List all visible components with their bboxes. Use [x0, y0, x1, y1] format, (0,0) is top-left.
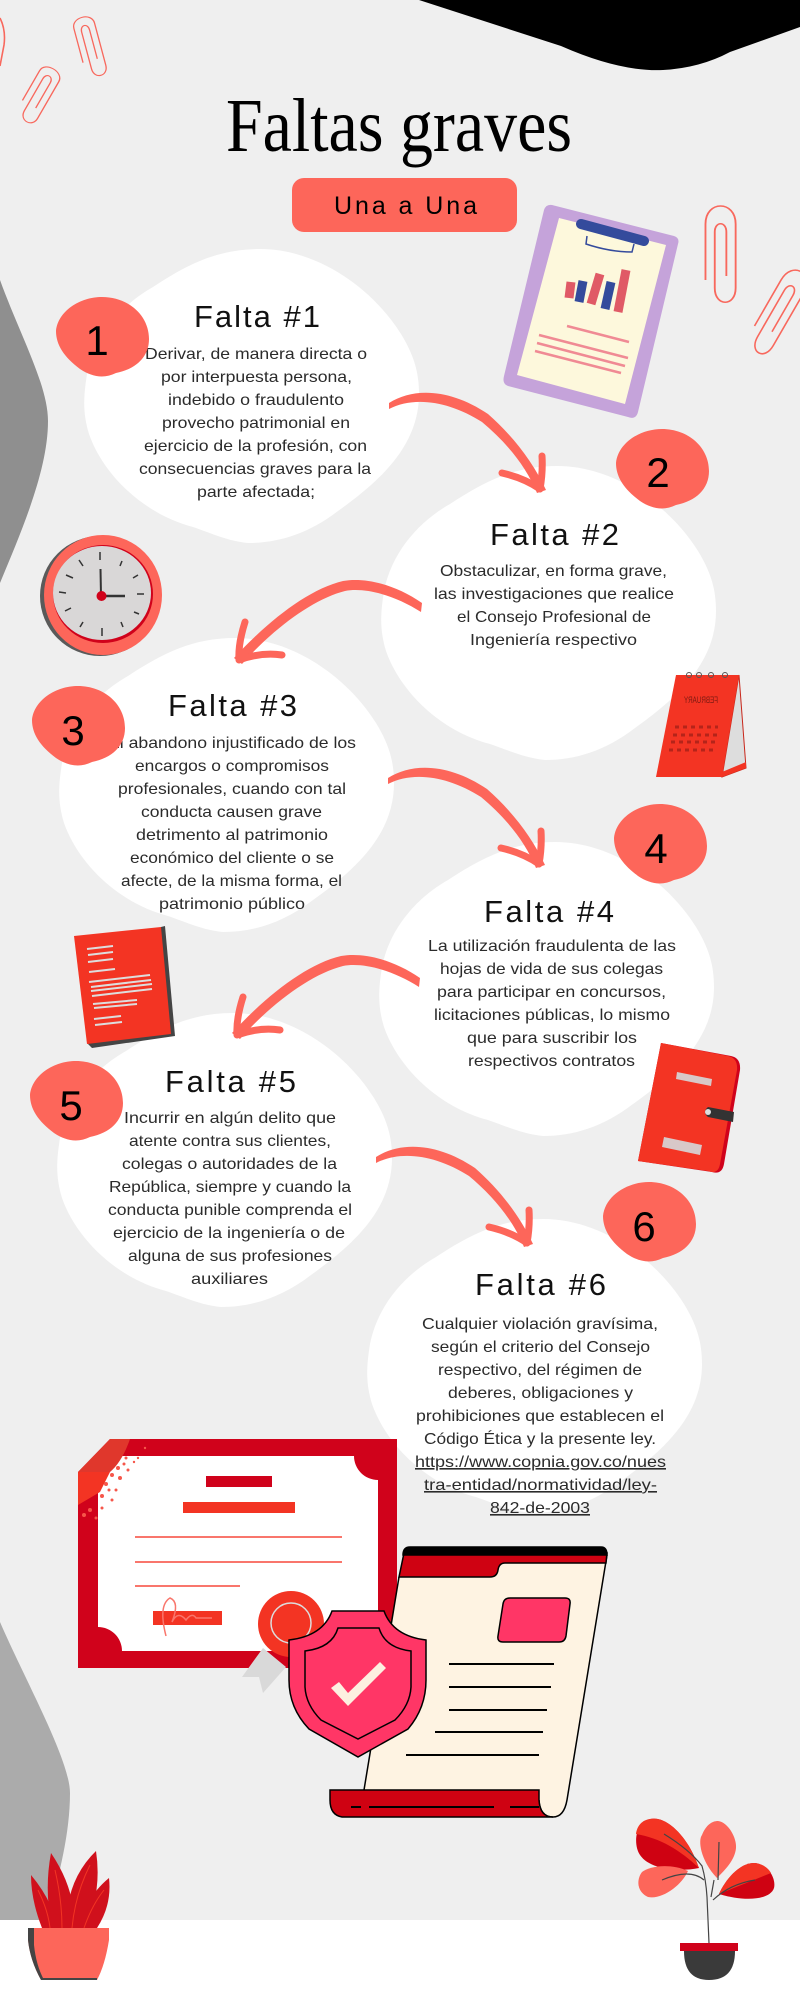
number badge 5: 5: [59, 1082, 83, 1129]
title: Faltas graves: [226, 84, 572, 168]
panel: falta 5: auxiliares: [191, 1271, 268, 1288]
gray shape left lower: [0, 1622, 70, 1920]
icon: potted plant left: [28, 1851, 110, 1980]
panel: falta 2: Obstaculizar, en forma grave,: [440, 563, 667, 580]
panel: falta 5: [57, 1013, 392, 1307]
gray shape left upper: [0, 280, 48, 583]
panel: falta 4: Falta #4: [484, 894, 614, 929]
panel: falta 6: [367, 1219, 702, 1517]
icon: red notebook: [638, 1043, 740, 1173]
number badge 4: 4: [644, 825, 668, 872]
panel: falta 6: prohibiciones que establecen el: [416, 1408, 664, 1425]
panel: falta 5: Falta #5: [165, 1064, 296, 1099]
panel: falta 1: por interpuesta persona,: [161, 369, 352, 386]
number badge 3: [32, 686, 125, 765]
panel: falta 1: parte afectada;: [197, 484, 315, 501]
number badge 6: [603, 1182, 696, 1261]
panel: falta 3: [59, 638, 394, 932]
number badge 5: [30, 1061, 123, 1140]
panel: falta 4: hojas de vida de sus colegas: [440, 961, 663, 978]
number badge 3: 3: [61, 707, 85, 754]
icon: shield with check: [289, 1611, 426, 1757]
panel: falta 5: Incurrir en algún delito que: [124, 1110, 336, 1127]
number badge 1: [56, 297, 149, 376]
panel: falta 3: El abandono injustificado de los: [108, 735, 356, 752]
number badge 1: 1: [85, 317, 109, 364]
arrow: falta 1 to 2: [389, 393, 546, 493]
panel: falta 4: para participar en concursos,: [437, 984, 666, 1001]
panel: falta 4: que para suscribir los: [467, 1030, 637, 1047]
panel: falta 4: respectivos contratos: [468, 1053, 635, 1070]
arrow: falta 2 to 3: [234, 580, 422, 664]
number badge 4: [614, 804, 707, 883]
panel: falta 1: Falta #1: [194, 299, 320, 334]
icon: clipboard: [504, 205, 678, 418]
panel: falta 2: el Consejo Profesional de: [457, 609, 651, 626]
icon: desk calendar: FEBRUARY: [684, 695, 718, 705]
panel: falta 6: deberes, obligaciones y: [448, 1385, 633, 1402]
paperclips top right: [705, 206, 800, 357]
decorative black blob top right: [419, 0, 800, 70]
arrow: falta 3 to 4: [388, 768, 545, 868]
panel: falta 5: conducta punible comprenda el: [108, 1202, 352, 1219]
panel: falta 3: detrimento al patrimonio: [136, 827, 328, 844]
arrow: falta 5 to 6: [376, 1147, 533, 1247]
panel: falta 1: ejercicio de la profesión, con: [144, 438, 367, 455]
panel: falta 6: Cualquier violación gravísima,: [422, 1316, 658, 1333]
icon: red document: [74, 926, 175, 1048]
panel: falta 3: conducta causen grave: [141, 804, 322, 821]
subtitle button: Una a Una: [334, 192, 477, 220]
panel: falta 3: encargos o compromisos: [135, 758, 329, 775]
panel: falta 1: indebido o fraudulento: [168, 392, 344, 409]
panel: falta 1: [84, 249, 419, 543]
panel: falta 4: [379, 842, 714, 1136]
paperclips top left: [0, 15, 108, 126]
panel: falta 3: patrimonio público: [159, 896, 305, 913]
panel: falta 6: tra-entidad/normatividad/ley-: [424, 1477, 657, 1494]
number badge 6: 6: [632, 1203, 656, 1250]
panel: falta 5: atente contra sus clientes,: [129, 1133, 331, 1150]
panel: falta 1: consecuencias graves para la: [139, 461, 371, 478]
panel: falta 5: República, siempre y cuando la: [109, 1179, 351, 1196]
panel: falta 2: las investigaciones que realice: [434, 586, 674, 603]
panel: falta 2: [381, 466, 716, 760]
panel: falta 6: 842-de-2003: [490, 1500, 590, 1517]
panel: falta 6: según el criterio del Consejo: [431, 1339, 650, 1356]
panel: falta 5: ejercicio de la ingeniería o de: [113, 1225, 345, 1242]
number badge 2: [616, 429, 709, 508]
number badge 2: 2: [646, 449, 670, 496]
icon: potted plant right: [636, 1819, 774, 1980]
panel: falta 3: económico del cliente o se: [130, 850, 334, 867]
panel: falta 5: colegas o autoridades de la: [122, 1156, 337, 1173]
panel: falta 1: Derivar, de manera directa o: [145, 346, 367, 363]
panel: falta 1: provecho patrimonial en: [162, 415, 350, 432]
icon: certificate: [78, 1439, 397, 1693]
icon: desk calendar: [656, 672, 746, 777]
panel: falta 3: Falta #3: [168, 688, 297, 723]
panel: falta 6: respectivo, del régimen de: [438, 1362, 642, 1379]
subtitle button: [292, 178, 517, 232]
panel: falta 3: afecte, de la misma forma, el: [121, 873, 342, 890]
arrow: falta 4 to 5: [232, 955, 420, 1039]
panel: falta 6: Falta #6: [475, 1267, 606, 1302]
panel: falta 6: Código Ética y la presente ley.: [424, 1429, 656, 1448]
panel: falta 2: Ingeniería respectivo: [470, 632, 637, 649]
panel: falta 6: https://www.copnia.gov.co/nues: [415, 1454, 666, 1471]
panel: falta 4: La utilización fraudulenta de las: [428, 938, 676, 955]
panel: falta 2: Falta #2: [490, 517, 619, 552]
panel: falta 5: alguna de sus profesiones: [128, 1248, 332, 1265]
panel: falta 3: profesionales, cuando con tal: [118, 781, 346, 798]
icon: clock: [40, 535, 162, 656]
panel: falta 4: licitaciones públicas, lo mismo: [434, 1007, 670, 1024]
icon: scroll document: [330, 1547, 607, 1817]
